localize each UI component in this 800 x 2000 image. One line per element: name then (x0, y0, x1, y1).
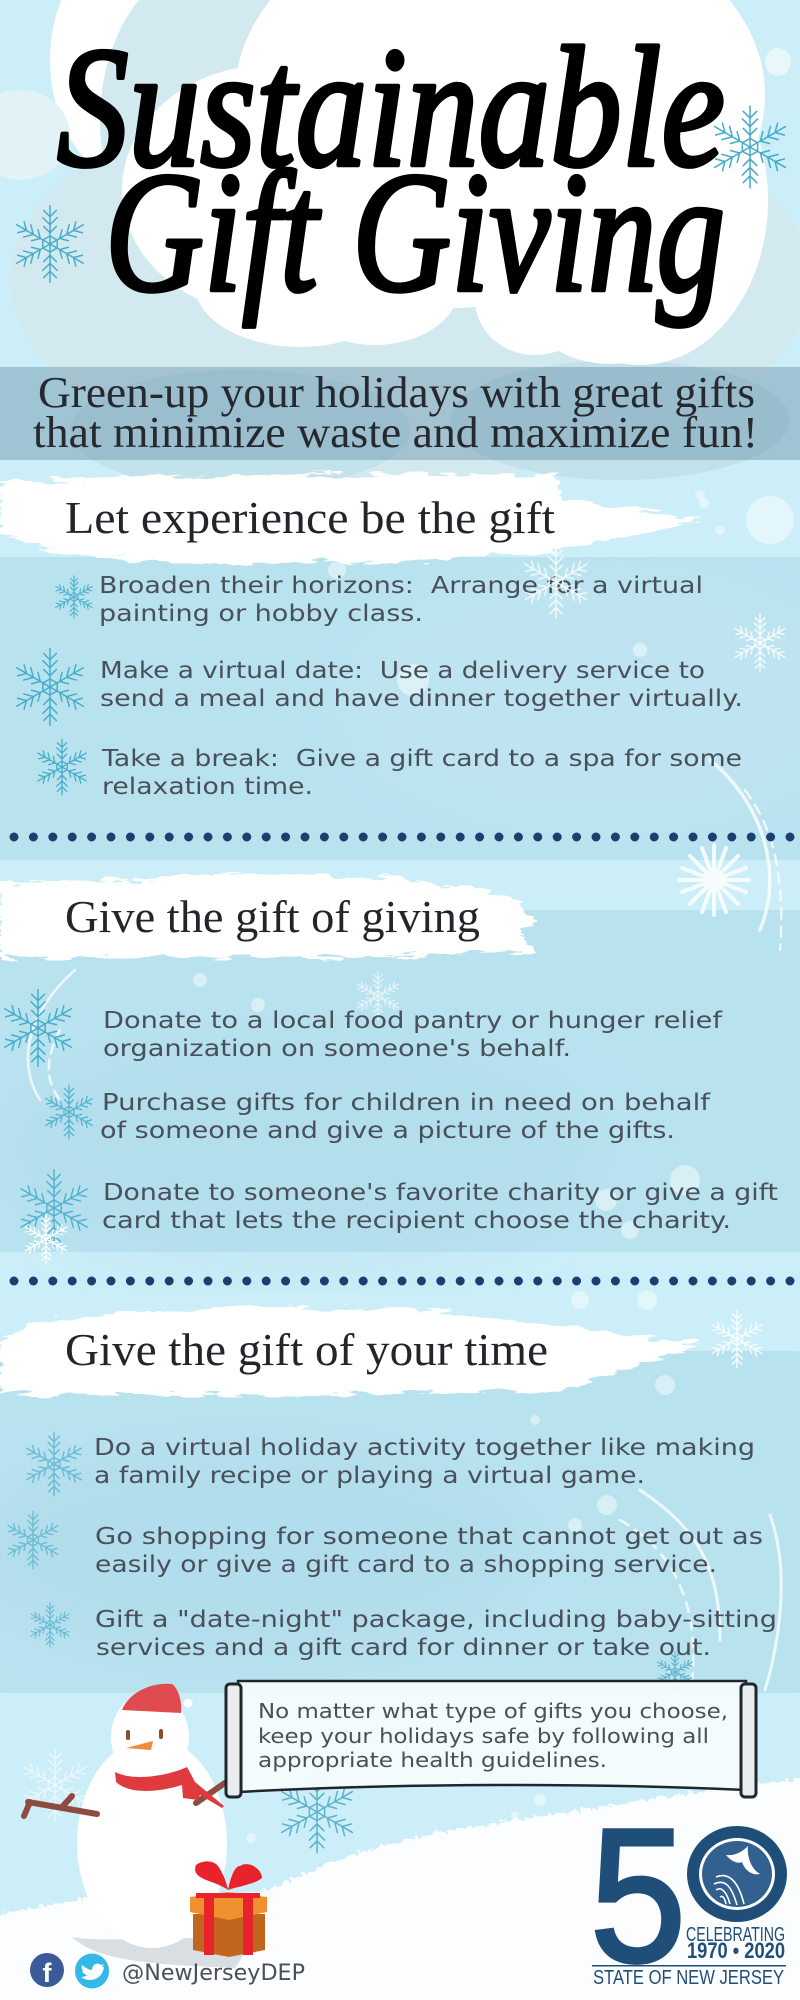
logo: NJ DEP 50th anniversary (590, 1790, 787, 2000)
decorative swirl lines (28, 760, 781, 1700)
numeral zero seal (687, 1826, 787, 1922)
text: virtual date: send a meal and have dinner together virtually. (100, 686, 743, 712)
left roller (226, 1684, 241, 1797)
icon: snowflake behind scroll corner (656, 1652, 694, 1692)
text: broaden horizons (99, 573, 703, 627)
heading: Give the gift of giving: Give the gift of giving (65, 891, 480, 942)
subtitle band: that minimize waste and maximize fun! (33, 408, 758, 457)
text: take a break (101, 746, 742, 800)
icon: snowflake top right (711, 106, 789, 188)
social handle: @NewJerseyDEP (122, 1961, 305, 1986)
arm left (24, 1796, 97, 1816)
decorative bokeh dots (193, 490, 794, 1843)
icon: snowflake (35, 739, 89, 795)
scarf (115, 1767, 224, 1808)
icon: white snowflake right (732, 614, 788, 672)
text: favorite charity (102, 1180, 778, 1234)
icon: white snowflake (23, 1215, 69, 1263)
text: broaden horizons: Broaden their horizons: Arrange for a virtual (99, 573, 703, 599)
icon: twitter (75, 1954, 109, 1988)
icon: white snowflake (355, 972, 401, 1020)
icon: snowflake (5, 1511, 61, 1569)
text: favorite charity: Donate to someone's favorite charity or give a gift (103, 1180, 778, 1206)
heading: Give the gift of your time: Give the gift of your time (65, 1324, 548, 1375)
header cloud (0, 0, 800, 490)
experience list (13, 573, 743, 800)
text: virtual date: Make a virtual date: Use a delivery service to (100, 658, 705, 684)
heading: Let experience be the gift: Let experience be the gift (65, 492, 555, 543)
text: food pantry: organization on someone's behalf. (103, 1036, 571, 1062)
gift box (190, 1861, 267, 1957)
icon: faint snowflake near snowman (20, 1749, 90, 1821)
text: broaden horizons: painting or hobby class. (99, 601, 423, 627)
icon: facebook: f (42, 1958, 52, 1988)
text: date night: Gift a "date-night" package, including baby-sitting (95, 1607, 777, 1633)
heading brush: experience (0, 474, 700, 564)
text: favorite charity: card that lets the recipient choose the charity. (102, 1208, 731, 1234)
icon: snowflake top left (13, 206, 87, 282)
pompom (184, 1698, 192, 1708)
arm right (196, 1778, 232, 1803)
giving list (1, 990, 778, 1263)
panel: time background (0, 1351, 800, 1693)
text: go shopping (95, 1524, 763, 1578)
scroll paper (238, 1681, 746, 1792)
head (111, 1692, 189, 1782)
text: date night: services and a gift card for dinner or take out. (96, 1635, 711, 1661)
text: go shopping: Go shopping for someone that cannot get out as (95, 1524, 763, 1550)
text: virtual activity: Do a virtual holiday activity together like making (94, 1435, 755, 1461)
text: virtual activity (94, 1435, 755, 1489)
text: take a break: Take a break: Give a gift card to a spa for some (101, 746, 742, 772)
shadow (72, 1937, 250, 1968)
icon: white burst (679, 845, 749, 915)
text: virtual activity: a family recipe or playing a virtual game. (94, 1463, 645, 1489)
text: virtual date (100, 658, 743, 712)
icon: white snowflake (521, 546, 591, 618)
body (77, 1738, 227, 1948)
ribbon (196, 1893, 260, 1955)
text: take a break: relaxation time. (102, 774, 313, 800)
icon: snowflake (24, 1432, 84, 1496)
icon: snowflake (17, 1170, 91, 1246)
subtitle band: Green-up your holidays with great gifts (38, 368, 755, 417)
subtitle band (0, 367, 800, 460)
time list (5, 1432, 777, 1661)
heading brush: time (0, 1306, 700, 1396)
panel: experience background (0, 557, 800, 860)
text: food pantry: Donate to a local food pantry or hunger relief (103, 1008, 723, 1034)
icon: snowflake (54, 576, 94, 618)
icon: snowflake (43, 1085, 95, 1139)
callout text: keep your holidays safe by following all (258, 1724, 709, 1748)
callout text: appropriate health guidelines. (258, 1748, 607, 1772)
title (57, 13, 725, 328)
right roller (741, 1684, 756, 1797)
hat (122, 1684, 181, 1713)
lid (190, 1892, 267, 1920)
eyes (128, 1731, 161, 1738)
panel: giving background (0, 910, 800, 1252)
icon: snowflake (29, 1603, 71, 1647)
icon: snowflake (1, 990, 75, 1066)
callout text (258, 1699, 728, 1772)
icon: snowflake below scroll (278, 1771, 356, 1853)
text: children in need: Purchase gifts for children in need on behalf (102, 1090, 711, 1116)
text: date night (95, 1607, 777, 1661)
box body (193, 1914, 265, 1957)
snowman (24, 1684, 250, 1968)
text: children in need (100, 1090, 711, 1144)
text: children in need: of someone and give a picture of the gifts. (100, 1118, 675, 1144)
snow ground (0, 1777, 800, 2000)
callout text: No matter what type of gifts you choose, (258, 1699, 728, 1723)
icon: facebook (30, 1953, 64, 1988)
text: go shopping: easily or give a gift card to a shopping service. (95, 1552, 717, 1578)
nose (126, 1741, 153, 1750)
numeral five: 5 (590, 1790, 686, 2000)
dotted divider (14, 1276, 796, 1286)
text: food pantry (103, 1008, 723, 1062)
icon: snowflake (13, 649, 87, 725)
icon: white snowflake (709, 1310, 765, 1368)
rule (592, 1965, 786, 1966)
heading brush: giving (0, 872, 535, 958)
dotted divider (14, 832, 796, 842)
scroll callout (226, 1681, 756, 1797)
bow (195, 1861, 262, 1890)
